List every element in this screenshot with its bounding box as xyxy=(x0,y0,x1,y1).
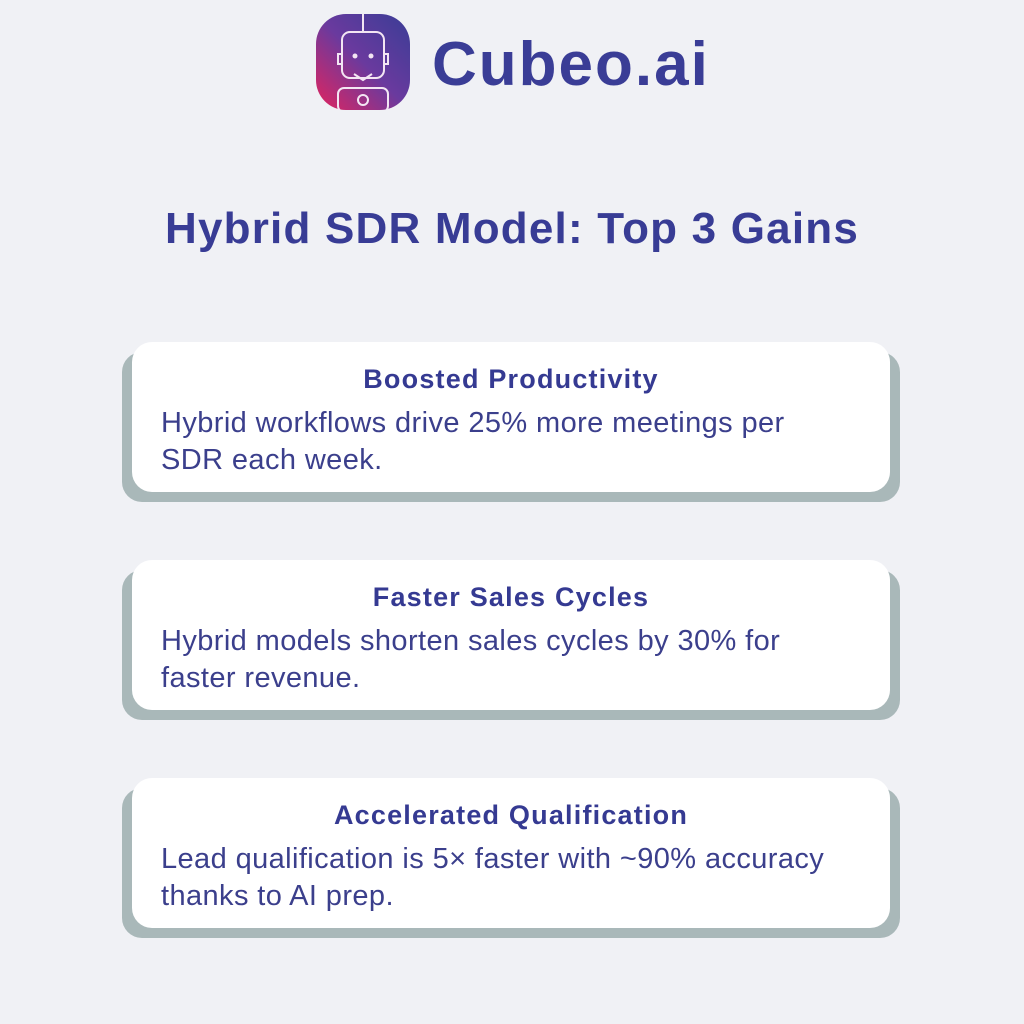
text xyxy=(161,407,785,476)
text xyxy=(161,625,780,694)
text: Lead qualification is 5× faster with ~90% accuracy xyxy=(161,843,824,875)
heading: Faster Sales Cycles xyxy=(373,582,649,612)
text: Hybrid models shorten sales cycles by 30% for xyxy=(161,625,780,657)
text: faster revenue. xyxy=(161,662,360,694)
text: Hybrid workflows drive 25% more meetings per xyxy=(161,407,785,439)
title: Hybrid SDR Model: Top 3 Gains xyxy=(165,204,859,253)
card: qualification xyxy=(122,778,900,938)
text xyxy=(161,843,824,912)
icon: robot xyxy=(316,14,410,110)
brand name: Cubeo.ai xyxy=(432,30,710,99)
text: SDR each week. xyxy=(161,444,383,476)
card: productivity xyxy=(122,342,900,502)
text: thanks to AI prep. xyxy=(161,880,394,912)
card: sales cycles xyxy=(122,560,900,720)
heading: Boosted Productivity xyxy=(363,364,659,394)
logo xyxy=(316,14,710,110)
heading: Accelerated Qualification xyxy=(334,800,688,830)
